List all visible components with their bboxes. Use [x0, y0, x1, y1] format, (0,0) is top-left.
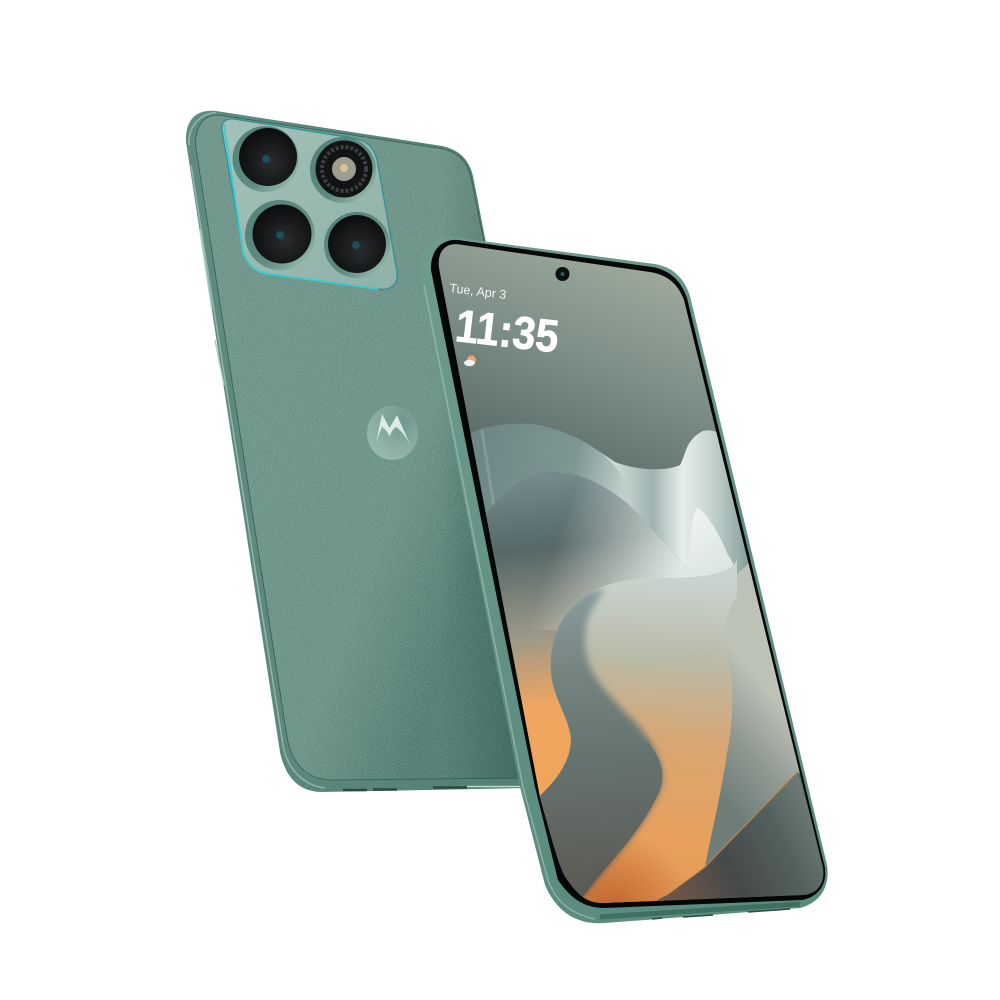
frame highlight [424, 285, 595, 919]
leather texture [186, 105, 531, 795]
wallpaper: hill glare [482, 430, 494, 508]
bottom edge ports [343, 788, 467, 790]
wallpaper: bottom right dark fold [656, 773, 824, 901]
frame highlights [189, 112, 325, 788]
motorola logo [367, 406, 418, 460]
wallpaper: right band [706, 564, 800, 866]
wallpaper: crisp ribbon [540, 740, 662, 897]
lens: bottom right [324, 212, 390, 278]
frame bottom shading [600, 904, 800, 917]
clock: 11:35 [453, 300, 562, 363]
date: Tue, Apr 3 [449, 281, 507, 302]
wallpaper: white fold [600, 430, 766, 636]
wallpaper: first hill [470, 424, 623, 560]
wallpaper: soft ribbon [540, 590, 662, 898]
back phone [186, 105, 531, 795]
island plate [222, 119, 397, 289]
side buttons [200, 230, 224, 385]
wallpaper: bottom burn [578, 845, 676, 903]
wallpaper [430, 240, 830, 910]
wallpaper: centre fold [540, 560, 737, 905]
back phone textured panel [196, 115, 530, 780]
wallpaper: sky gradient [430, 240, 830, 910]
bezel [431, 240, 825, 908]
wallpaper: white peak [690, 508, 734, 576]
wallpaper: second hill and orange [486, 472, 695, 820]
lens: bottom left [245, 200, 315, 270]
second hill light [538, 480, 695, 630]
weather icon [464, 356, 476, 366]
punch-hole camera [556, 267, 570, 281]
cyan edge glow [224, 125, 378, 289]
product illustration: two phones [186, 110, 828, 924]
back phone frame [186, 111, 530, 792]
lens: top left [232, 126, 298, 192]
front phone frame [420, 237, 828, 923]
lens: top right macro [310, 137, 376, 203]
bottom edge highlight [467, 786, 520, 788]
front phone [420, 237, 830, 923]
camera island [222, 119, 397, 289]
front bottom ports [652, 909, 790, 919]
